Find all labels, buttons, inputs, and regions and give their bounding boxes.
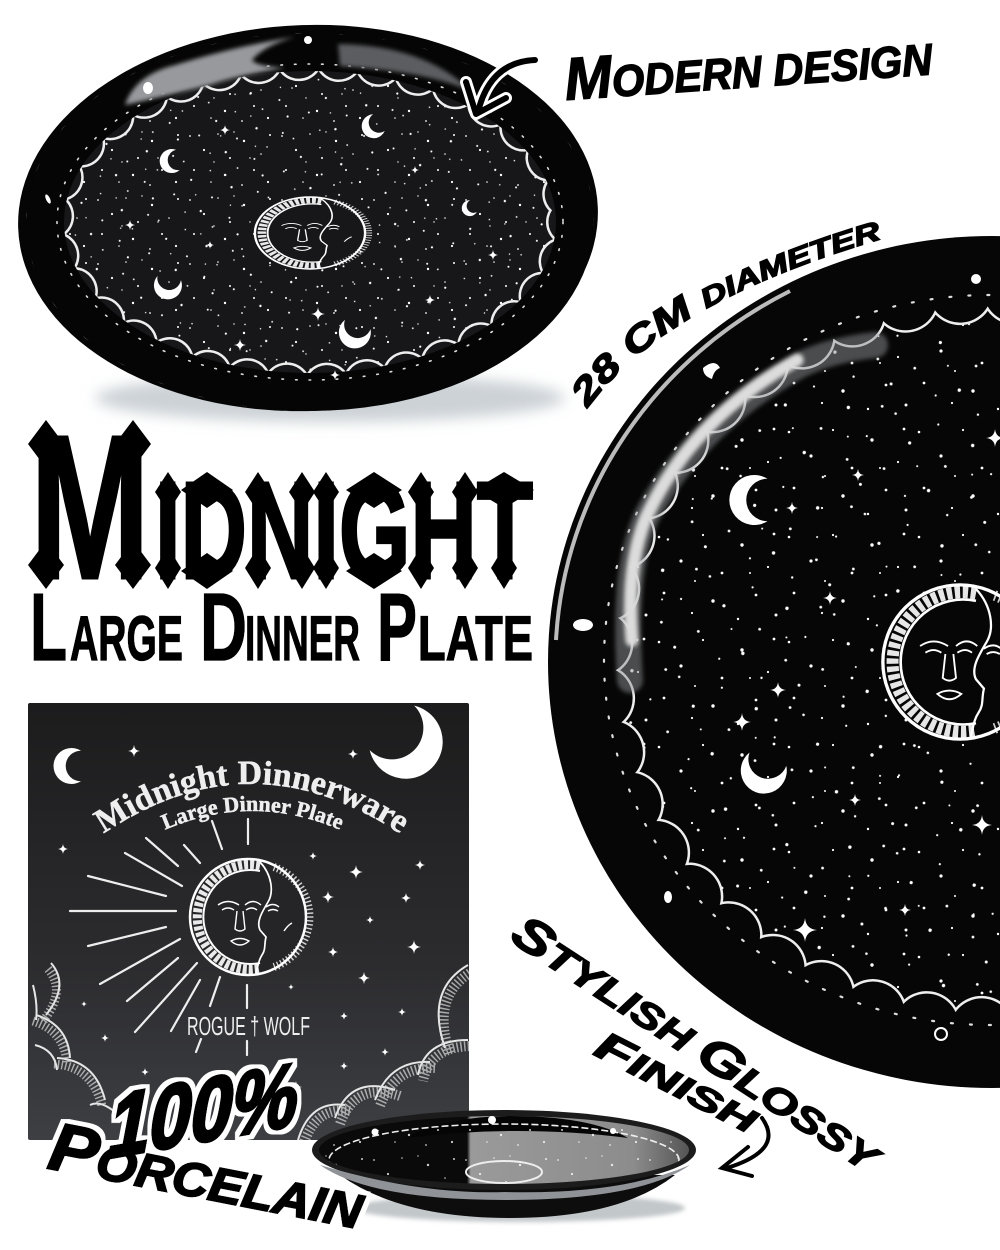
box stars — [58, 745, 425, 1093]
sun rays — [70, 819, 248, 1055]
subtitle: Large Dinner Plate: ARGE — [70, 604, 183, 674]
subtitle: Large Dinner Plate: L — [30, 574, 67, 681]
box title: Large Dinner Plate — [160, 796, 342, 830]
box title: Midnight Dinnerware — [92, 760, 406, 834]
plate shadow — [95, 374, 565, 422]
subtitle: Large Dinner Plate: INNER — [245, 604, 360, 674]
panel: large plate photo — [548, 236, 1000, 1088]
subtitle: Large Dinner Plate: LATE — [418, 604, 533, 674]
small plate stars and border — [325, 1123, 680, 1182]
starfield — [66, 73, 554, 371]
rim dots — [372, 1116, 616, 1136]
title: Midnight: M — [30, 393, 150, 622]
panel: gift box — [28, 703, 469, 1140]
callout: 100% porcelain: 100% — [107, 1043, 300, 1177]
reflection top — [405, 1116, 628, 1138]
large plate field starfield — [616, 307, 1000, 1013]
callout: 100% porcelain — [43, 1043, 371, 1244]
small plate rim sheen — [320, 1165, 690, 1200]
callout: Modern design — [466, 20, 935, 114]
stem spikes — [28, 420, 534, 589]
crescent moons — [729, 475, 790, 800]
rim dots — [573, 274, 981, 1040]
small plate base — [340, 1175, 675, 1218]
rim edge highlight — [556, 291, 790, 640]
sparkle stars — [125, 125, 498, 380]
subtitle: Large Dinner Plate: D — [200, 574, 247, 681]
small plate rim — [312, 1110, 696, 1190]
finish: FINISH — [588, 1023, 766, 1143]
brand: ROGUE † WOLF — [187, 1011, 310, 1041]
box clouds — [33, 963, 473, 1146]
rim gloss — [125, 37, 472, 105]
arrow — [466, 60, 535, 114]
panel: top plate photo — [11, 15, 605, 422]
small plate field — [319, 1116, 689, 1184]
plate rim — [11, 15, 605, 421]
gloss reflection — [628, 345, 875, 680]
small plate shadow — [355, 1194, 685, 1222]
subtitle: Large Dinner Plate: P — [377, 574, 417, 681]
sparkle stars — [733, 429, 1000, 942]
box crescents — [54, 702, 458, 794]
title: Midnight: IDNIGHT — [155, 454, 533, 608]
panel: small plate photo — [312, 1110, 696, 1222]
porcelain: PORCELAIN — [43, 1108, 371, 1244]
title: Midnight — [28, 393, 534, 622]
callout: Modern design: MODERN DESIGN — [562, 20, 935, 113]
small plate medallion — [466, 1161, 542, 1183]
scalloped cloud border — [45, 52, 575, 392]
moon medallion — [255, 197, 368, 269]
crescent moons — [152, 113, 477, 353]
plate inner field — [64, 71, 556, 373]
callout: 28 cm diameter: 28 CM DIAMETER — [573, 222, 881, 410]
scalloped cloud border — [589, 280, 1000, 1040]
moon medallion — [190, 859, 309, 975]
moon medallion — [883, 585, 1000, 739]
arrow — [722, 1118, 769, 1176]
box face — [28, 703, 469, 1140]
callout: Stylish Glossy Finish: STYLISH GLOSSY — [502, 905, 893, 1185]
large plate rim — [548, 236, 1000, 1088]
rim dots — [44, 36, 502, 204]
subtitle: Large Dinner Plate — [30, 574, 533, 681]
